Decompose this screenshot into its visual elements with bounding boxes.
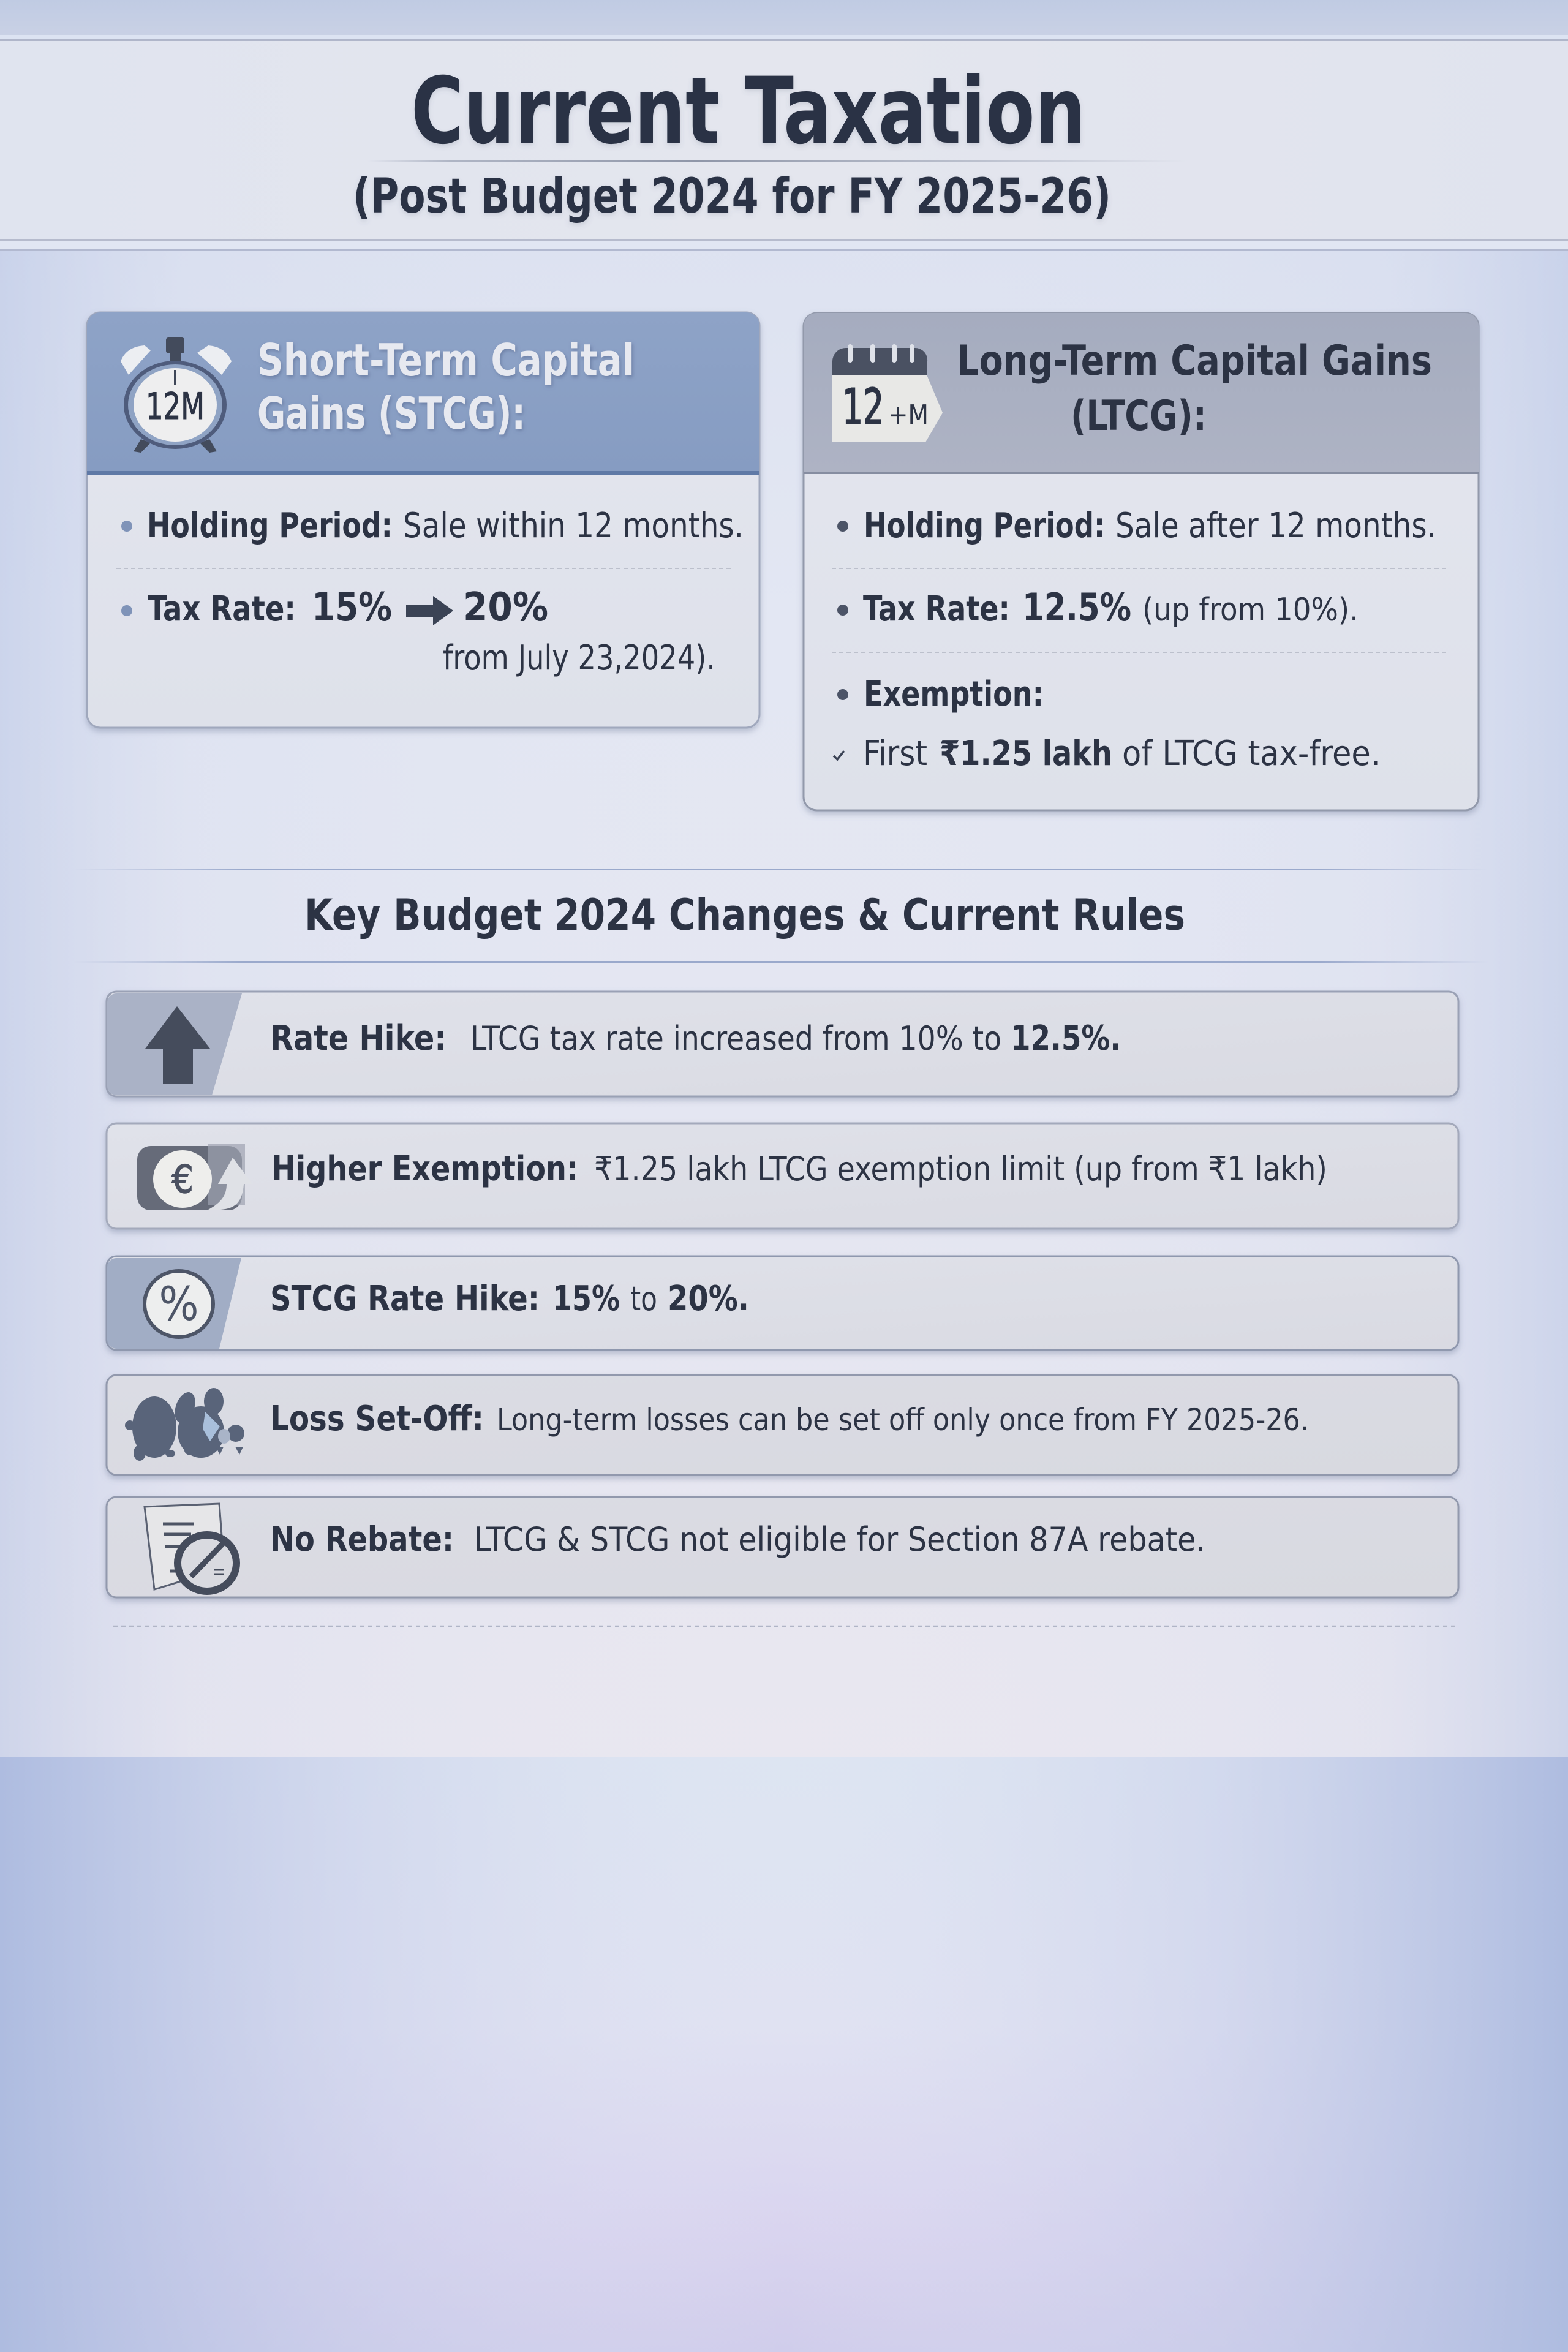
subtitle: (Post Budget 2024 for FY 2025-26) [353, 169, 1111, 224]
row: rate hike: LTCG tax rate increased from 10% to [470, 1019, 1001, 1058]
LTCG heading [957, 337, 1432, 440]
row: no rebate: No Rebate: [270, 1520, 454, 1559]
arrow: 15 to 20 [406, 596, 453, 625]
icon: 12+ month calendar: 12 [842, 379, 884, 435]
row: STCG rate hike: 20%. [668, 1279, 749, 1319]
LTCG exemption: First [863, 734, 927, 774]
row: no rebate [107, 1497, 1458, 1597]
STCG heading: Short-Term Capital [257, 334, 635, 386]
STCG tax rate: Tax Rate: [148, 589, 296, 629]
LTCG tax rate [837, 585, 1359, 630]
icon: euro note with arrow [137, 1144, 252, 1210]
icon: document with prohibited percent [145, 1504, 236, 1591]
row: rate hike: Rate Hike: [270, 1019, 447, 1058]
LTCG tax rate: (up from 10%). [1142, 592, 1359, 628]
row: loss set-off: Long-term losses can be set off only once from FY 2025-26. [497, 1402, 1309, 1438]
LTCG holding period: Holding Period: [864, 506, 1105, 546]
LTCG exemption: of LTCG tax-free. [1122, 734, 1381, 774]
panel: long-term capital gains [804, 313, 1479, 810]
icon: percent badge [145, 1271, 213, 1337]
LTCG holding period [837, 506, 1436, 546]
STCG tax rate: 15% [312, 585, 392, 630]
row: STCG rate hike: 15% [552, 1279, 620, 1319]
icon: 12M alarm clock: 12M [146, 385, 205, 428]
icon: euro note with arrow: € [172, 1157, 194, 1202]
row: higher exemption: ₹1.25 lakh LTCG exemption limit (up from ₹1 lakh) [594, 1150, 1327, 1188]
row: STCG rate hike: STCG Rate Hike: [270, 1279, 540, 1319]
icon: loss set-off figures [125, 1388, 244, 1461]
header band [0, 0, 1568, 251]
icon: 12+ month calendar: +M [888, 399, 929, 431]
LTCG header [804, 313, 1479, 474]
row: STCG rate hike: to [630, 1280, 657, 1318]
row: higher exemption [107, 1123, 1458, 1229]
STCG heading: Gains (STCG): [257, 388, 526, 439]
icon: percent badge: % [159, 1276, 198, 1331]
row: rate hike: 12.5%. [1011, 1019, 1121, 1058]
LTCG tax rate: 12.5% [1022, 585, 1131, 630]
STCG heading [257, 334, 635, 439]
STCG holding period: Sale within 12 months. [403, 506, 744, 546]
section heading: key budget changes: Key Budget 2024 Changes & Current Rules [304, 890, 1185, 940]
row: STCG rate hike [107, 1256, 1458, 1350]
row: rate hike [107, 992, 1458, 1096]
row: higher exemption: Higher Exemption: [271, 1149, 578, 1189]
section heading: key budget changes [74, 869, 1488, 963]
title: Current Taxation [411, 58, 1086, 165]
LTCG heading: Long-Term Capital Gains [957, 337, 1432, 385]
LTCG holding period: Sale after 12 months. [1115, 506, 1436, 546]
STCG tax rate [121, 585, 715, 678]
LTCG tax rate: Tax Rate: [863, 589, 1010, 629]
row: loss set-off [107, 1375, 1458, 1475]
row: no rebate: LTCG & STCG not eligible for Section 87A rebate. [474, 1520, 1205, 1559]
STCG tax rate: from July 23,2024). [443, 638, 715, 678]
LTCG exemption: ₹1.25 lakh [940, 734, 1112, 774]
LTCG exemption: Exemption: [864, 674, 1044, 714]
STCG holding period: Holding Period: [147, 506, 393, 546]
row: loss set-off: Loss Set-Off: [270, 1399, 484, 1439]
LTCG exemption [834, 674, 1381, 774]
STCG tax rate: 20% [463, 585, 548, 630]
LTCG heading: (LTCG): [1071, 392, 1207, 440]
STCG holding period [121, 506, 744, 546]
STCG header [87, 312, 760, 475]
icon: 12+ month calendar [832, 344, 943, 442]
icon: up arrow [145, 1006, 210, 1084]
icon: 12M alarm clock [121, 337, 232, 453]
panel: short-term capital gains [87, 312, 760, 728]
